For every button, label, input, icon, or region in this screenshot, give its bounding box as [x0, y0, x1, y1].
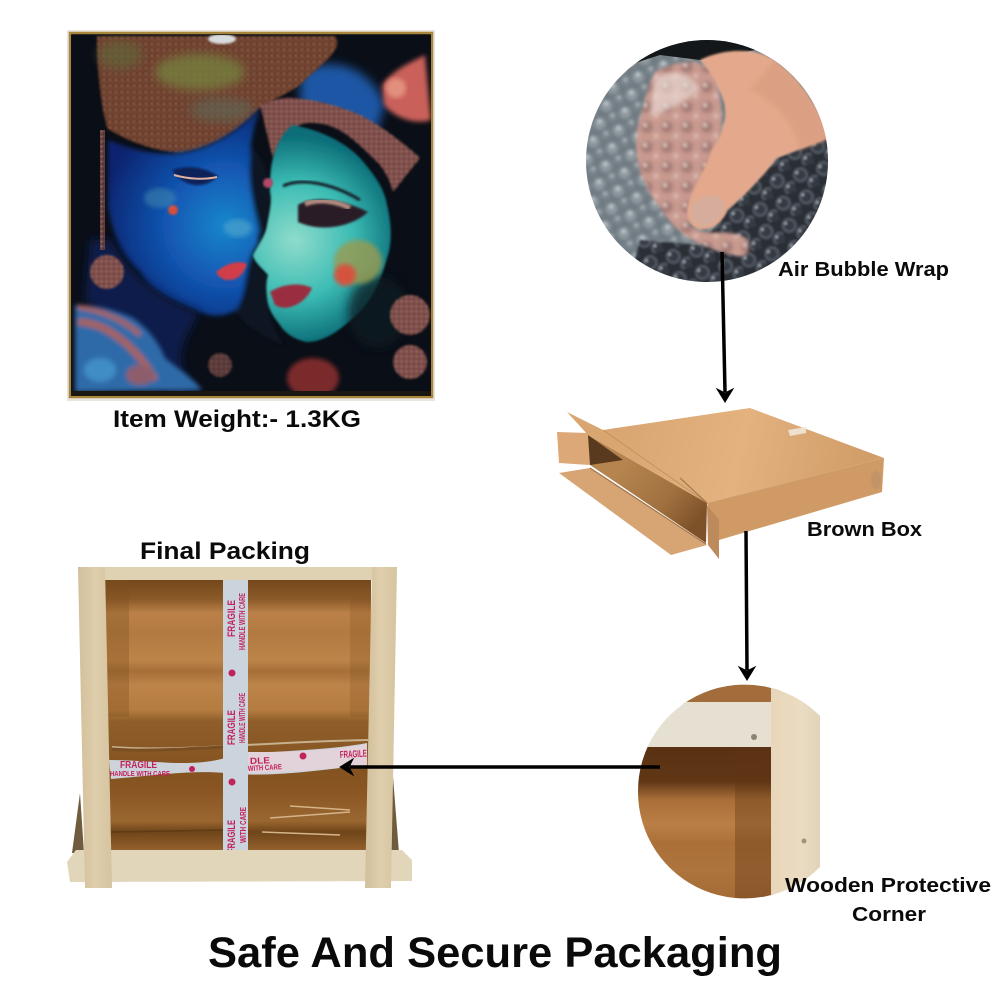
right brow [283, 182, 360, 200]
dark sleeve at top [636, 40, 755, 63]
tape label [788, 427, 806, 436]
label: air bubble wrap: Air Bubble Wrap [778, 258, 949, 281]
top bar [100, 567, 380, 580]
icon: wooden protective corner photo [630, 684, 821, 904]
panel: final packing crate: WITH CARE [248, 762, 282, 773]
label: brown box: Brown Box [807, 519, 922, 541]
interior [588, 435, 707, 543]
fragile tape horizontal [109, 743, 367, 779]
bottom bar [67, 850, 412, 882]
right post [365, 567, 397, 888]
right lips [270, 285, 312, 308]
panel: final packing crate: FRAGILE [226, 820, 238, 853]
icon: air bubble wrap photo [586, 40, 828, 282]
icon: brown box [557, 408, 884, 559]
panel: final packing crate: FRAGILE [120, 760, 157, 771]
panel: final packing crate: HANDLE WITH CARE [238, 593, 247, 650]
hand [687, 51, 830, 229]
bottom flap [559, 468, 707, 555]
white crinkle highlight [650, 73, 700, 115]
right cheek [334, 240, 382, 284]
top face with open flap [567, 408, 884, 503]
right eye [298, 200, 368, 227]
panel: final packing crate [67, 567, 412, 888]
right face [253, 125, 391, 342]
label: wooden protective corner [785, 875, 991, 926]
tape text: FRAGILE [226, 600, 238, 637]
left nose highlight [224, 219, 252, 237]
panel: final packing crate: DLE [250, 755, 270, 766]
pink wrap over fingers [636, 62, 749, 256]
left eye [172, 167, 218, 185]
panel: product painting [67, 30, 435, 401]
label: wooden protective corner: Corner [852, 904, 926, 926]
fragile tape vertical [223, 580, 248, 854]
left lips [216, 262, 247, 280]
side face [707, 458, 884, 540]
panel: final packing crate: WITH CARE [239, 806, 248, 843]
left face [108, 108, 285, 345]
cardboard [105, 577, 371, 854]
jewels [100, 130, 105, 250]
label: final packing: Final Packing [140, 538, 310, 565]
panel: final packing crate: FRAGILE [340, 749, 367, 761]
left post [78, 567, 112, 888]
small end flap [557, 432, 590, 465]
panel: final packing crate: FRAGILE [226, 710, 238, 745]
arrow: box to corner [739, 531, 755, 680]
crown [97, 36, 337, 153]
arrow: wrap to box [717, 252, 733, 402]
panel: final packing crate: HANDLE WITH CARE [238, 693, 247, 743]
label: item weight: Item Weight:- 1.3KG [113, 406, 361, 433]
label: wooden protective corner: Wooden Protective [785, 875, 991, 897]
title: Safe And Secure Packaging [208, 929, 782, 977]
left cheek spot [168, 205, 178, 215]
panel: final packing crate: HANDLE WITH CARE [110, 769, 170, 778]
right headband [260, 98, 420, 192]
dark face gap [236, 145, 285, 345]
hand [75, 305, 202, 392]
end flap [707, 505, 719, 559]
hazard glass icons [228, 670, 236, 676]
rear wedges [72, 793, 84, 853]
thumbnail [691, 195, 724, 226]
flower [382, 55, 431, 122]
arrow: corner to final packing [340, 759, 660, 775]
wrap scratches [112, 740, 368, 748]
neck shadow [85, 240, 200, 396]
dark lower bubbles [634, 136, 828, 282]
blue hair [300, 64, 385, 135]
